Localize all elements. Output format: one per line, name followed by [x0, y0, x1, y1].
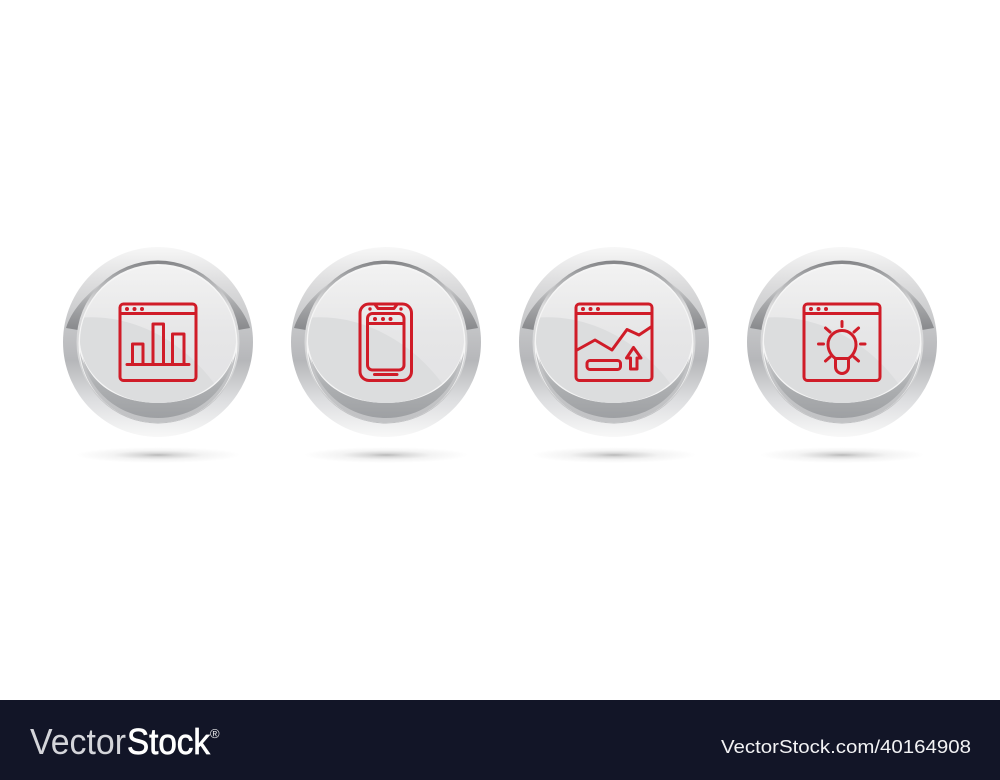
VectorStock logo: Vector — [30, 721, 126, 762]
button 1: bar chart in browser window — [63, 247, 253, 463]
icon: browser growth chart with arrow — [576, 304, 652, 380]
silver button base — [63, 247, 253, 463]
silver button base — [519, 247, 709, 463]
VectorStock logo: Stock — [127, 721, 211, 762]
button 2: smartphone — [291, 247, 481, 463]
infographic canvas — [0, 247, 1000, 780]
icon: browser bar chart — [120, 304, 196, 380]
button 4: light bulb — [747, 247, 937, 463]
image id url: VectorStock.com/40164908 — [721, 737, 971, 757]
silver button base — [747, 247, 937, 463]
VectorStock logo — [30, 721, 211, 762]
button 3: growth chart — [519, 247, 709, 463]
silver button base — [291, 247, 481, 463]
icon: browser light bulb — [804, 304, 880, 380]
icon: smartphone with browser screen — [360, 304, 412, 380]
registered mark: ® — [210, 726, 220, 741]
footer bar — [0, 700, 1000, 780]
